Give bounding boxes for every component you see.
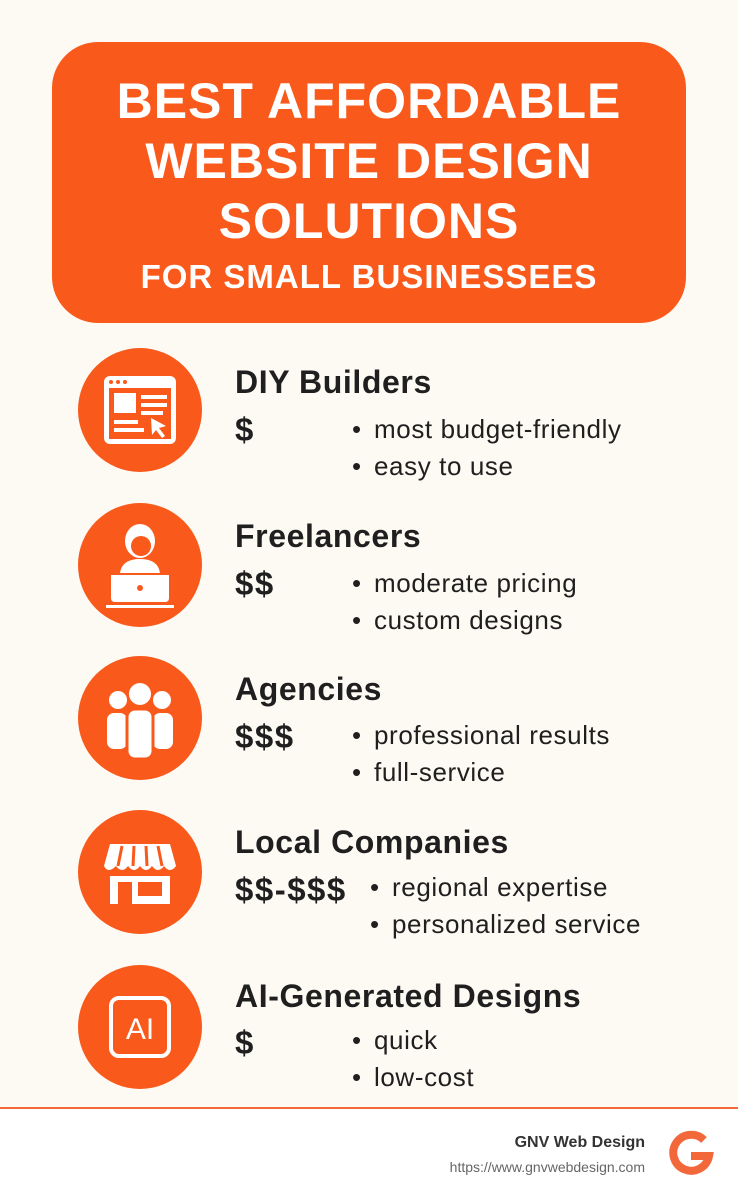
title: SOLUTIONS bbox=[219, 193, 519, 249]
text: • bbox=[352, 757, 362, 787]
text: • bbox=[352, 1062, 362, 1092]
text: • bbox=[352, 414, 362, 444]
heading: DIY: DIY Builders bbox=[235, 364, 432, 400]
text: • bbox=[352, 1025, 362, 1055]
footer: GNV Web Design bbox=[515, 1134, 645, 1151]
text: regional expertise bbox=[392, 872, 608, 902]
text: full-service bbox=[374, 757, 505, 787]
text: personalized service bbox=[392, 909, 641, 939]
title bbox=[52, 42, 686, 323]
text: $$$ bbox=[235, 718, 295, 755]
text: • bbox=[370, 872, 380, 902]
text: $$-$$$ bbox=[235, 871, 347, 908]
title: WEBSITE DESIGN bbox=[145, 133, 593, 189]
text: • bbox=[352, 605, 362, 635]
text: • bbox=[352, 451, 362, 481]
footer bbox=[0, 1107, 738, 1200]
text: professional results bbox=[374, 720, 610, 750]
text: $$ bbox=[235, 565, 275, 602]
text: easy to use bbox=[374, 451, 514, 481]
heading: AI: AI-Generated Designs bbox=[235, 978, 581, 1014]
text: • bbox=[352, 568, 362, 598]
text: most budget-friendly bbox=[374, 414, 622, 444]
logo bbox=[669, 1130, 714, 1175]
footer: https://www.gnvwebdesign.com bbox=[450, 1159, 645, 1175]
text: $ bbox=[235, 1024, 255, 1061]
icon: AI bbox=[78, 965, 202, 1089]
icon: freelancer bbox=[78, 503, 202, 627]
text: moderate pricing bbox=[374, 568, 577, 598]
title: BEST AFFORDABLE bbox=[117, 73, 621, 129]
text: • bbox=[370, 909, 380, 939]
icon: browser bbox=[78, 348, 202, 472]
heading: Freelancers: Freelancers bbox=[235, 518, 421, 554]
icon: people bbox=[78, 656, 202, 780]
icon: store bbox=[78, 810, 202, 934]
icon: AI: AI bbox=[126, 1013, 154, 1046]
text: custom designs bbox=[374, 605, 563, 635]
text: $ bbox=[235, 411, 255, 448]
text: quick bbox=[374, 1025, 438, 1055]
heading: Local: Local Companies bbox=[235, 824, 509, 860]
text: low-cost bbox=[374, 1062, 474, 1092]
heading: Agencies: Agencies bbox=[235, 671, 382, 707]
text: • bbox=[352, 720, 362, 750]
title: FOR SMALL BUSINESSEES bbox=[141, 258, 597, 295]
